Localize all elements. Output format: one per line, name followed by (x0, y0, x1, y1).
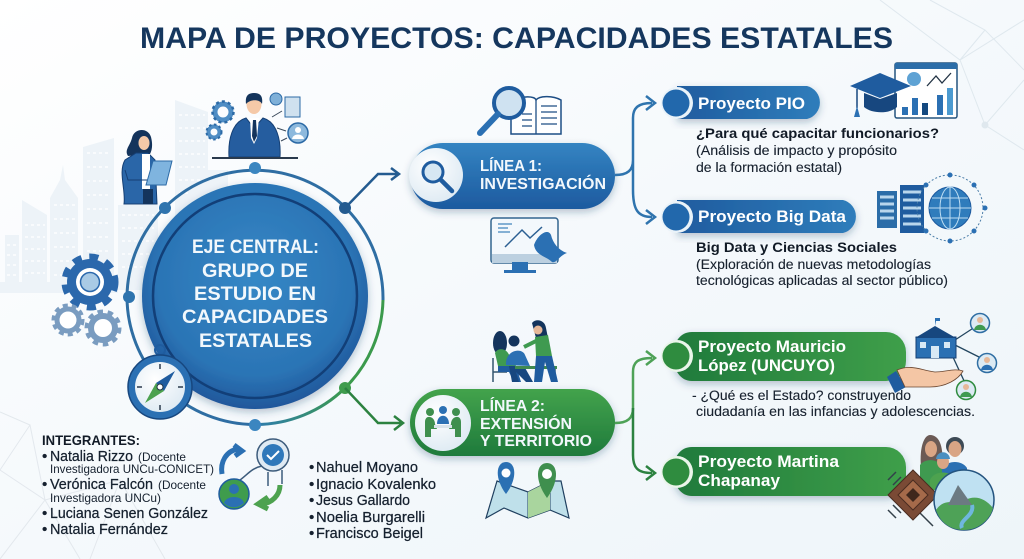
ring nodes (123, 162, 351, 431)
members: column 2: Ignacio Kovalenko (316, 476, 436, 493)
panel: proyecto Mauricio López (661, 332, 906, 381)
line 2 label: EXTENSIÓN (480, 414, 572, 433)
members: column 2: Francisco Beigel (316, 525, 423, 542)
outer ring (127, 170, 383, 425)
panel: proyecto Mauricio López: Proyecto Mauricio (698, 337, 846, 356)
panel: proyecto PIO: Proyecto PIO (698, 94, 805, 113)
line 2 label (480, 396, 592, 450)
members: column 1: Verónica Falcón (50, 476, 153, 493)
members: column 1: Luciana Senen González (50, 505, 208, 522)
icon: gears (54, 257, 120, 344)
text: proyecto PIO description: (Análisis de impacto y propósito (696, 143, 897, 158)
members: column 1: INTEGRANTES: (42, 432, 140, 448)
members: column 2: • (309, 476, 314, 493)
icon: man at desk (206, 93, 308, 159)
title: MAPA DE PROYECTOS: CAPACIDADES ESTATALES (140, 22, 893, 55)
text: proyecto PIO description: ¿Para qué capacitar funcionarios? (696, 125, 939, 141)
icon: team meeting (493, 320, 558, 382)
icon: map with pins (486, 462, 569, 518)
icon: school on hand with people (887, 314, 996, 400)
line 1 label (480, 156, 606, 193)
line 1 label: INVESTIGACIÓN (480, 174, 606, 193)
members: column 1: Investigadora UNCu-CONICET) (50, 462, 214, 476)
central disc (142, 183, 368, 409)
text: Big Data description: (Exploración de nuevas metodologías (696, 257, 931, 272)
central heading: ESTUDIO EN (194, 284, 316, 305)
members: column 1: (Docente (138, 450, 186, 464)
members: column 1: • (42, 476, 47, 493)
arrow: hub to line 2 (345, 388, 403, 430)
icon: magnifier badge (409, 148, 463, 202)
connector: line 2 to projects (615, 351, 655, 423)
icon: community, textile and landscape (888, 435, 994, 530)
text: proyecto PIO description (696, 125, 939, 175)
members: column 1: Natalia Rizzo (50, 448, 133, 465)
members: column 1: Natalia Fernández (50, 521, 168, 538)
connector: line 1 to projects (615, 96, 655, 224)
central heading: CAPACIDADES (182, 307, 328, 328)
panel: line 2 pill (410, 389, 615, 456)
members: column 2: Nahuel Moyano (316, 459, 418, 476)
text: Big Data description: Big Data y Ciencias Sociales (696, 239, 897, 255)
decorative network bottom left (0, 412, 165, 559)
text: Mauricio López description (692, 388, 975, 419)
members: column 1: (Docente (158, 478, 206, 492)
central heading: GRUPO DE (202, 261, 308, 282)
panel: proyecto PIO (661, 86, 820, 119)
panel: line 1 pill (409, 143, 615, 209)
icon: monitor with chart (491, 218, 567, 273)
members: column 1: • (42, 505, 47, 522)
icon: team badge (415, 395, 471, 451)
members: column 2 (309, 459, 436, 542)
members: column 1 (42, 432, 214, 538)
panel: proyecto Martina Chapanay: Proyecto Martina (698, 452, 840, 471)
members: column 2: Noelia Burgarelli (316, 509, 425, 526)
icon: compass (128, 345, 192, 419)
central hub (123, 162, 383, 431)
central heading: EJE CENTRAL: (192, 237, 319, 258)
text: Mauricio López description: - ¿Qué es el Estado? construyendo (692, 388, 911, 403)
members: column 2: • (309, 492, 314, 509)
line 2 label: LÍNEA 2: (480, 396, 545, 415)
members: column 2: • (309, 459, 314, 476)
members: column 2: • (309, 509, 314, 526)
icon: magnifier and book (480, 88, 561, 134)
decorative network top right (880, 0, 1024, 150)
panel: proyecto Big Data (661, 200, 856, 233)
icon: woman with clipboard (122, 130, 172, 204)
panel: proyecto Big Data: Proyecto Big Data (698, 207, 847, 226)
members: column 1: • (42, 448, 47, 465)
central heading (182, 237, 328, 352)
text: Mauricio López description: ciudadanía en las infancias y adolescencias. (696, 404, 975, 419)
panel: proyecto Mauricio López: López (UNCUYO) (698, 356, 835, 375)
background skyline (0, 100, 228, 293)
text: proyecto PIO description: de la formación estatal) (696, 160, 842, 175)
line 2 label: Y TERRITORIO (480, 433, 592, 450)
members: column 2: • (309, 525, 314, 542)
text: Big Data description (696, 239, 948, 288)
text: Big Data description: tecnológicas aplicadas al sector público) (696, 273, 948, 288)
connector: line 2 to Chapanay (633, 408, 655, 480)
central heading: ESTATALES (199, 331, 312, 352)
line 1 label: LÍNEA 1: (480, 156, 542, 175)
icon: servers and globe (877, 172, 988, 244)
icon: award and person cycle (219, 439, 289, 509)
panel: proyecto Martina Chapanay (661, 447, 906, 496)
panel: proyecto Martina Chapanay: Chapanay (698, 471, 781, 490)
members: column 2: Jesus Gallardo (316, 492, 410, 509)
members: column 1: • (42, 521, 47, 538)
icon: graduation cap and dashboard (850, 63, 957, 118)
members: column 1: Investigadora UNCu) (50, 491, 161, 505)
arrow: hub to line 1 (345, 168, 399, 208)
